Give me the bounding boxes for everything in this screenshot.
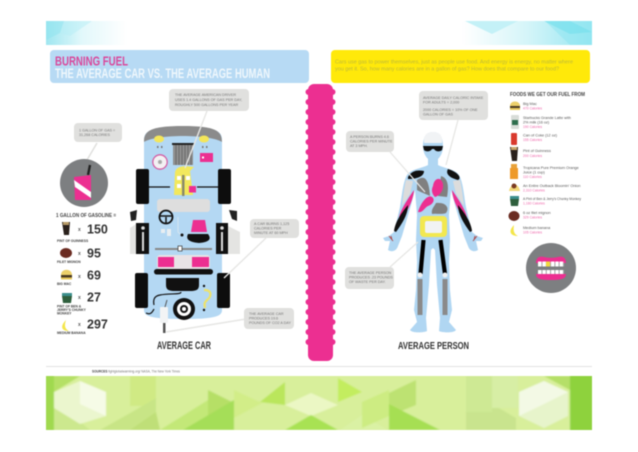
row: big mac: 69 (87, 268, 101, 282)
callout: daily caloric intake: FOR ADULTS = 2,000 (423, 100, 459, 104)
row: filet mignon (57, 246, 101, 264)
car body (144, 127, 222, 319)
row: guinness: PINT OF GUINNESS (57, 239, 89, 243)
headlights (154, 136, 209, 148)
dashboard (157, 199, 210, 212)
callout: driver gallons: THE AVERAGE AMERICAN DRIVER (175, 93, 236, 97)
food: filet: 6 oz filet mignon (523, 211, 551, 215)
row: banana: 297 (87, 318, 108, 332)
food: guinness: Pint of Guinness (523, 149, 551, 153)
right arm muscles (452, 190, 467, 222)
heading banner: burning fuel: BURNING FUEL (55, 54, 128, 68)
axle (149, 186, 218, 188)
food: latte: Starbucks Grande Latte with (523, 116, 571, 120)
callout: waste: PRODUCES .23 POUNDS (349, 276, 393, 280)
food: orange juice: 110 Calories (523, 175, 542, 179)
label: average car: AVERAGE CAR (157, 340, 211, 352)
food: latte: 190 Calories (523, 125, 542, 129)
food: bloomin onion: 2,310 Calories (523, 188, 545, 192)
steering wheel (160, 210, 184, 236)
list heading: 1 GALLON OF GASOLINE = (56, 213, 117, 219)
heart (432, 179, 443, 197)
gallon equivalents list (56, 213, 117, 335)
callout: person burns: CALORIES PER MINUTE (350, 140, 393, 144)
row: guinness: x (78, 227, 81, 233)
row: ben and jerry's: MONKEY (57, 312, 72, 316)
callout: driver gallons: USES 1.4 GALLONS OF GAS PER DAY, (175, 98, 242, 102)
row: ben and jerry's: x (78, 295, 81, 301)
fuel line (146, 292, 181, 314)
sunglasses (423, 146, 443, 151)
callout: one gallon of gas (74, 123, 122, 160)
callout: car CO2 (244, 308, 294, 329)
sources: SOURCES fightglobalwarming.org/ NASA, The New York Times (92, 370, 180, 374)
food: ice cream: 1,160 Calories (523, 202, 545, 206)
heading banner: burning fuel (50, 50, 309, 83)
food: latte: 2% milk (16 oz) (523, 120, 550, 124)
femurs (420, 240, 445, 274)
intro banner: yellow: you get it. So, how many calories are in a gallon of gas? How does that compare to our food? (335, 66, 560, 72)
callout: daily caloric intake: 2000 CALORIES = 10% OF ONE (423, 108, 478, 112)
callout: car burns: CALORIES PER (254, 226, 282, 230)
yellow hose (203, 285, 210, 311)
food: bloomin onion: An Entire Outback Bloomin' Onion (523, 184, 580, 188)
callout: waste: OF WASTE PER DAY. (349, 280, 386, 284)
row: guinness (57, 222, 108, 243)
callout: driver gallons: ROUGHLY 500 GALLONS PER YEAR (175, 103, 238, 107)
row: guinness: 150 (87, 222, 108, 236)
food: filet: 329 Calories (523, 216, 542, 220)
callout: car CO2: POUNDS OF CO2 A DAY (249, 321, 291, 325)
battery (200, 153, 213, 162)
pink scalloped divider (308, 84, 333, 361)
row: big mac: x (78, 274, 81, 280)
callout: person burns: A PERSON BURNS 4.6 (350, 135, 389, 139)
label: average person: AVERAGE PERSON (398, 340, 469, 352)
stomach (432, 203, 448, 214)
foods heading: FOODS WE GET OUR FUEL FROM (510, 92, 585, 98)
row: filet mignon: 95 (87, 246, 101, 260)
food: latte (511, 115, 571, 129)
front seat (187, 220, 210, 243)
callout: one gallon of gas: 1 GALLON OF GAS = (79, 128, 115, 132)
food: big mac: 470 Calories (523, 106, 542, 110)
spare tire (173, 298, 195, 320)
food: ice cream (510, 196, 581, 206)
food: coke: 155 Calories (523, 138, 542, 142)
fuel tank (166, 278, 199, 291)
row: banana (57, 318, 108, 335)
callout lines for person (390, 120, 458, 267)
food: guinness: 200 Calories (523, 154, 542, 158)
callout: waste: THE AVERAGE PERSON (349, 271, 392, 275)
heading banner: burning fuel: THE AVERAGE CAR VS. THE AVERAGE HUMAN (55, 66, 270, 81)
mirrors and door wings (130, 210, 240, 254)
intro banner: yellow: Cars use gas to power themselves, just as people use food. And energy is energy, no matter where (335, 60, 573, 66)
callout: driver gallons (169, 89, 249, 111)
shins (420, 279, 445, 315)
food: banana: Medium banana (523, 226, 551, 230)
icon: gas pump circle (60, 159, 108, 207)
food: ice cream: A Pint of Ben & Jerry's Chunky Monkey (523, 197, 581, 201)
callout: car CO2: THE AVERAGE CAR (249, 312, 284, 316)
rear seat (154, 255, 213, 274)
callout: person burns (346, 131, 394, 152)
body silhouette (383, 132, 483, 332)
food: big mac (510, 102, 542, 110)
left arm muscles (399, 190, 414, 222)
callout: car burns: MINUTE AT 60 MPH (254, 231, 288, 235)
hood (144, 126, 222, 142)
food: big mac: Big Mac (523, 102, 537, 106)
infographic canvas (45, 20, 593, 431)
intestines (420, 216, 447, 237)
icon: mouth circle (526, 243, 576, 293)
callout: car burns: A CAR BURNS 1,125 (254, 222, 289, 226)
row: ben and jerry's: PINT OF BEN & (57, 304, 82, 308)
top decorative band (46, 21, 592, 45)
footer rule (46, 366, 592, 367)
row: big mac (57, 268, 101, 286)
liver (418, 196, 434, 212)
food: coke: Can of Coke (12 oz) (523, 134, 558, 138)
row: ben and jerry's: 27 (87, 290, 101, 304)
doors (136, 223, 228, 254)
food: filet (508, 211, 551, 221)
wheels (135, 169, 231, 308)
callout: waste (345, 267, 394, 289)
exhaust pipe (160, 300, 168, 333)
food: guinness (510, 147, 551, 161)
row: ben and jerry's: JERRY'S CHUNKY (57, 308, 87, 312)
food: orange juice (510, 164, 579, 179)
row: filet mignon: x (78, 251, 81, 257)
engine (174, 166, 196, 196)
radiator grille (172, 143, 194, 165)
car illustration (130, 126, 240, 333)
food: banana: 105 Calories (523, 230, 542, 234)
green geometric band (45, 375, 593, 431)
food: orange juice: Juice (1 cup) (523, 170, 545, 174)
intro banner: yellow (331, 50, 590, 83)
food: banana (511, 225, 551, 236)
callout: daily caloric intake (419, 91, 488, 120)
ring gauge (153, 155, 167, 169)
callout: one gallon of gas: 31,268 CALORIES (79, 133, 110, 137)
gear slider (155, 246, 212, 251)
callout: daily caloric intake: GALLON OF GAS (423, 112, 453, 116)
lungs (417, 178, 430, 196)
foods list (508, 92, 585, 236)
row: banana: x (78, 322, 81, 328)
row: ben and jerry's (57, 290, 101, 316)
row: banana: MEDIUM BANANA (57, 331, 86, 335)
human figure (383, 132, 483, 332)
food: orange juice: Tropicana Pure Premium Orange (523, 166, 579, 170)
callout: car burns (250, 219, 299, 238)
callout: daily caloric intake: AVERAGE DAILY CALORIC INTAKE (423, 96, 484, 100)
hand details (389, 236, 477, 241)
row: filet mignon: FILET MIGNON (57, 260, 81, 264)
callout: person burns: AT 3 MPH. (350, 144, 368, 148)
row: big mac: BIG MAC (57, 282, 72, 286)
food: coke (511, 133, 558, 145)
callout: car CO2: PRODUCES 19.6 (249, 316, 278, 320)
food: bloomin onion (509, 184, 580, 192)
brain (424, 132, 442, 143)
callout lines for car (166, 111, 266, 332)
shoulders (408, 171, 424, 179)
